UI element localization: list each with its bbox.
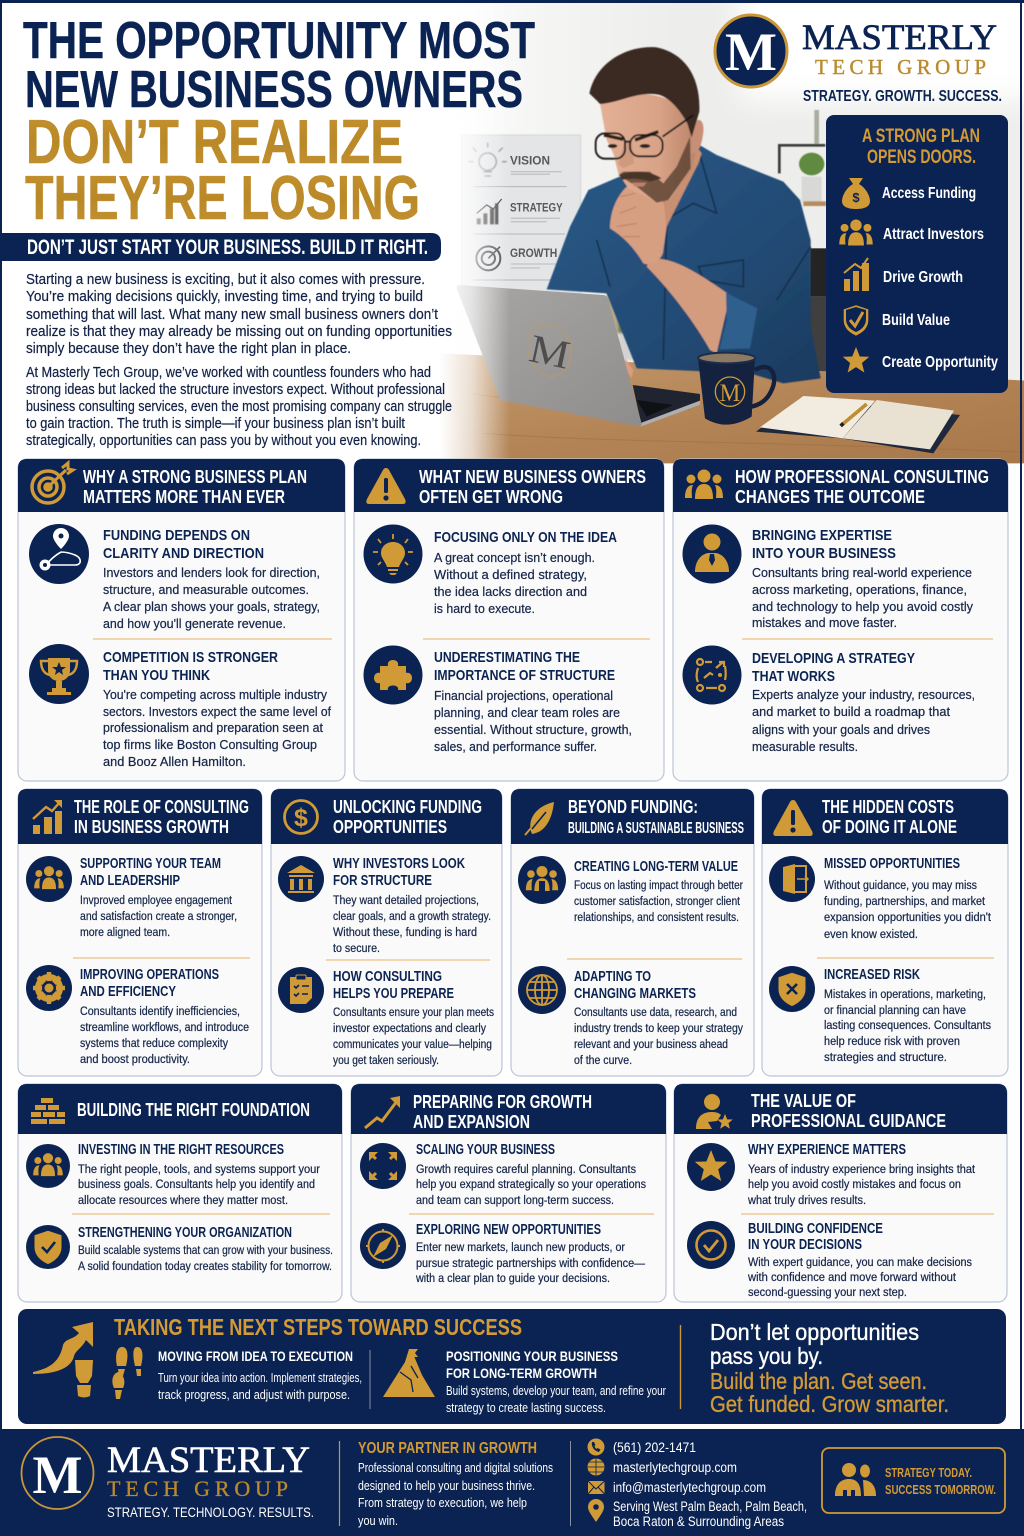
title: THE OPPORTUNITY MOST [23, 12, 535, 70]
item: bringing expertise: Consultants bring real-world experience [752, 565, 972, 580]
call to action text: Get funded. Grow smarter. [710, 1391, 949, 1417]
item: scaling your business: and team can support long-term success. [416, 1193, 614, 1207]
intro paragraph 1 [26, 272, 452, 357]
item: competition is stronger [29, 644, 331, 769]
panel heading: BUILDING A SUSTAINABLE BUSINESS [568, 820, 744, 837]
hair [589, 47, 699, 137]
shelf with plant [779, 110, 826, 206]
icon: dollar coin [284, 800, 318, 834]
laptop: M [525, 325, 574, 378]
panel: beyond funding [511, 789, 754, 1076]
item: investing in the right resources: allocate resources where they matter most. [78, 1193, 288, 1207]
benefit: drive growth: Drive Growth [883, 269, 963, 286]
item: adapting to changing markets: CHANGING MARKETS [574, 986, 696, 1002]
footer: contact details: info@masterlytechgroup.com [613, 1480, 766, 1495]
item: strengthening your organization: STRENGTHENING YOUR ORGANIZATION [78, 1225, 292, 1241]
item: funding depends on clarity: structure, and measurable outcomes. [103, 582, 309, 597]
step: moving from idea to execution: MOVING FROM IDEA TO EXECUTION [158, 1349, 353, 1364]
item: increased risk: or financial planning can have [824, 1003, 966, 1017]
panel heading: UNLOCKING FUNDING [333, 797, 482, 817]
panel heading [862, 126, 980, 168]
item: scaling your business: help you expand strategically so your operations [416, 1177, 646, 1191]
item: supporting your team: AND LEADERSHIP [80, 873, 180, 889]
icon: expand arrows [360, 1143, 406, 1189]
logo: Masterly Tech Group: TECH GROUP [815, 55, 986, 79]
step: positioning your business: strategy to create lasting success. [446, 1401, 606, 1415]
item: underestimating structure: planning, and clear team roles are [434, 705, 620, 720]
item: investing in the right resources: The right people, tools, and systems support your [78, 1162, 320, 1176]
item: competition is stronger: sectors. Investors expect the same level of [103, 704, 331, 719]
panel heading: OPPORTUNITIES [333, 817, 447, 837]
item: underestimating structure: UNDERESTIMATING THE [434, 649, 580, 666]
footer: your partner in growth: Professional consulting and digital solutions [358, 1461, 553, 1475]
icon: community [518, 856, 566, 904]
tagline banner [0, 233, 441, 261]
intro paragraph 2: strategically, opportunities can pass you by without you even knowing. [26, 433, 421, 449]
item: exploring new opportunities: Enter new markets, launch new products, or [416, 1240, 625, 1254]
item: improving operations: Consultants identify inefficiencies, [80, 1004, 240, 1018]
item: supporting your team: SUPPORTING YOUR TEAM [80, 856, 221, 872]
icon: compass [360, 1223, 406, 1269]
icon: light bulb [364, 524, 422, 584]
icon: star [687, 1143, 735, 1191]
item: increased risk: INCREASED RISK [824, 967, 920, 983]
footer logo: TECH GROUP [107, 1476, 288, 1501]
item: developing a strategy: THAT WORKS [752, 668, 835, 685]
title: NEW BUSINESS OWNERS [25, 61, 523, 119]
panel heading [822, 797, 957, 837]
panel heading: OFTEN GET WRONG [419, 487, 563, 507]
item: exploring new opportunities: with a clear plan to guide your decisions. [415, 1271, 610, 1285]
heading: TAKING THE NEXT STEPS TOWARD SUCCESS [114, 1314, 522, 1340]
panel: what new business owners get wrong [354, 459, 664, 781]
icon: check shield [26, 1225, 70, 1269]
panel: unlocking funding opportunities [271, 789, 502, 1076]
item: developing a strategy: aligns with your goals and drives [752, 722, 930, 737]
benefit: create opportunity: Create Opportunity [882, 354, 998, 371]
icon: consultant [682, 524, 742, 584]
icon: bank [278, 856, 324, 902]
footer: your partner in growth: YOUR PARTNER IN GROWTH [358, 1440, 537, 1457]
benefit: build value [844, 305, 950, 336]
benefit: attract investors [839, 219, 984, 245]
poster: vision, strategy, growth [462, 135, 581, 295]
item: bringing expertise [682, 524, 973, 630]
item: creating long-term value [518, 856, 743, 924]
icon: gear [26, 965, 72, 1011]
panel: role of consulting [18, 789, 262, 1076]
icon: door [769, 856, 815, 902]
title: DON’T REALIZE [26, 108, 403, 177]
item: why investors look for structure: They want detailed projections, [333, 893, 479, 907]
panel heading [333, 797, 482, 837]
mug: M [720, 379, 740, 407]
footer: contact details: Boca Raton & Surrounding Areas [613, 1514, 784, 1529]
icon: check circle [687, 1221, 735, 1269]
item: adapting to changing markets: of the curve. [574, 1053, 632, 1067]
mug [698, 353, 774, 425]
item: focusing only on the idea: FOCUSING ONLY ON THE IDEA [434, 529, 617, 546]
item: improving operations: IMPROVING OPERATIONS [80, 967, 219, 983]
footer: contact details: masterlytechgroup.com [613, 1460, 737, 1475]
item: adapting to changing markets: relevant and your business ahead [574, 1037, 728, 1051]
item: strengthening your organization [26, 1225, 333, 1273]
item: how consulting helps you prepare: you get taken seriously. [333, 1053, 439, 1067]
desk [440, 353, 1024, 463]
step: moving from idea to execution: Turn your idea into action. Implement strategies, [158, 1371, 362, 1385]
item: underestimating structure: essential. Without structure, growth, [434, 722, 632, 737]
neck [663, 140, 702, 227]
item: strengthening your organization: A solid foundation today creates stability for tomorrow. [78, 1259, 332, 1273]
icon: phone [588, 1438, 604, 1456]
laptop [457, 285, 700, 427]
item: building confidence [687, 1221, 972, 1299]
item: missed opportunities: even know existed. [824, 927, 918, 941]
tagline banner: DON’T JUST START YOUR BUSINESS. BUILD IT RIGHT. [27, 236, 428, 259]
icon: envelope [588, 1481, 604, 1494]
panel heading [419, 467, 646, 507]
intro paragraph 1: something that will last. What many new small business owners don’t [26, 307, 438, 323]
poster: vision, strategy, growth: GROWTH [510, 246, 557, 260]
logo badge: M [725, 22, 777, 82]
item: increased risk [769, 966, 991, 1064]
step: moving from idea to execution [158, 1349, 362, 1402]
item: supporting your team: Invproved employee engagement [80, 893, 233, 907]
item: missed opportunities: expansion opportunities you didn't [824, 910, 992, 924]
call to action text: pass you by. [710, 1343, 823, 1369]
intro paragraph 2 [26, 365, 452, 449]
panel heading [751, 1091, 946, 1131]
item: bringing expertise: INTO YOUR BUSINESS [752, 545, 896, 562]
item: building confidence: with confidence and move forward without [747, 1270, 957, 1284]
icon: team [26, 856, 72, 902]
icon: web globe [588, 1458, 604, 1476]
item: increased risk: Mistakes in operations, marketing, [824, 987, 986, 1001]
item: supporting your team [26, 856, 237, 939]
logo: Masterly Tech Group [715, 15, 1002, 105]
item: why investors look for structure: FOR STRUCTURE [333, 873, 432, 889]
panel heading [413, 1092, 592, 1132]
step: positioning your business: POSITIONING YOUR BUSINESS [446, 1349, 618, 1364]
item: why experience matters: help you avoid costly mistakes and focus on [748, 1177, 961, 1191]
item: improving operations: streamline workflows, and introduce [80, 1020, 249, 1034]
item: scaling your business [360, 1142, 646, 1207]
icon: route pin [29, 524, 89, 584]
item: missed opportunities: MISSED OPPORTUNITIES [824, 856, 960, 872]
item: funding depends on clarity: and how you'll generate revenue. [103, 616, 286, 631]
intro paragraph 2: business consulting services, even the most promising company can struggle [26, 399, 452, 415]
item: why experience matters [687, 1142, 976, 1207]
item: developing a strategy: and market to build a roadmap that [752, 704, 950, 719]
hand on chin [610, 187, 667, 264]
icon: clipboard [278, 967, 324, 1013]
panel heading: OPENS DOORS. [867, 147, 976, 168]
footer: your partner in growth [358, 1440, 553, 1528]
item: focusing only on the idea: the idea lacks direction and [434, 584, 587, 599]
benefit: access funding: Access Funding [882, 185, 976, 202]
footer logo: MASTERLY [107, 1440, 310, 1481]
item: strengthening your organization: Build scalable systems that can grow with your business. [78, 1243, 333, 1257]
item: improving operations: systems that reduce complexity [80, 1036, 229, 1050]
icon: rising arrow and steps [33, 1322, 142, 1399]
item: competition is stronger: and Booz Allen Hamilton. [103, 754, 246, 769]
item: focusing only on the idea: is hard to execute. [434, 601, 535, 616]
intro paragraph 2: to gain traction. The truth is simple—if your business plan isn’t built [26, 416, 405, 432]
item: creating long-term value: CREATING LONG-TERM VALUE [574, 859, 738, 875]
item: bringing expertise: across marketing, operations, finance, [752, 582, 967, 597]
item: bringing expertise: and technology to help you avoid costly [752, 599, 973, 614]
item: improving operations: AND EFFICIENCY [80, 984, 176, 1000]
item: creating long-term value: Focus on lasting impact through better [574, 878, 743, 892]
call to action text: Don’t let opportunities [710, 1319, 919, 1345]
item: underestimating structure: IMPORTANCE OF STRUCTURE [434, 667, 615, 684]
item: developing a strategy: Experts analyze your industry, resources, [752, 687, 975, 702]
item: focusing only on the idea: Without a defined strategy, [434, 567, 587, 582]
item: how consulting helps you prepare: HOW CONSULTING [333, 969, 442, 985]
call to action text [710, 1319, 949, 1417]
background items behind laptop [607, 287, 635, 360]
item: exploring new opportunities [360, 1222, 646, 1285]
item: funding depends on clarity: CLARITY AND DIRECTION [103, 545, 264, 562]
item: investing in the right resources: business goals. Consultants help you identify and [78, 1177, 315, 1191]
icon: location pin [588, 1499, 604, 1522]
icon: strategy map [682, 646, 742, 704]
logo: Masterly Tech Group: MASTERLY [802, 17, 997, 57]
panel heading: THE VALUE OF [751, 1091, 856, 1111]
shirt [547, 143, 821, 383]
benefit: access funding [842, 178, 976, 209]
panel: why a strong business plan matters [18, 459, 345, 781]
icon: warning [773, 800, 813, 836]
item: increased risk: strategies and structure. [824, 1050, 947, 1064]
hero photo: founder at laptop [440, 0, 1024, 463]
poster: vision, strategy, growth: STRATEGY [510, 201, 563, 215]
item: missed opportunities [769, 856, 992, 941]
item: adapting to changing markets: Consultants use data, research, and [574, 1005, 737, 1019]
panel: the value of professional guidance [674, 1084, 1007, 1302]
item: focusing only on the idea [364, 524, 617, 616]
panel heading: BEYOND FUNDING: [568, 797, 698, 817]
item: competition is stronger: top firms like Boston Consulting Group [103, 737, 317, 752]
item: how consulting helps you prepare [278, 967, 494, 1067]
icon: dollar coin: $ [294, 804, 308, 832]
item: how consulting helps you prepare: Consultants ensure your plan meets [333, 1005, 494, 1019]
item: bringing expertise: BRINGING EXPERTISE [752, 527, 892, 544]
item: underestimating structure: Financial projections, operational [434, 688, 613, 703]
panel heading: MATTERS MORE THAN EVER [83, 487, 285, 507]
item: why investors look for structure: to secure. [333, 941, 380, 955]
eyebrows and eyes [604, 132, 658, 140]
footer: your partner in growth: designed to help your business thrive. [358, 1479, 535, 1493]
icon: risk shield [769, 966, 815, 1012]
logo badge [715, 15, 787, 87]
item: building confidence: BUILDING CONFIDENCE [748, 1221, 883, 1237]
benefit: attract investors: Attract Investors [883, 226, 984, 243]
item: funding depends on clarity: A clear plan shows your goals, strategy, [103, 599, 320, 614]
item: scaling your business: SCALING YOUR BUSINESS [416, 1142, 555, 1158]
item: building confidence: With expert guidance, you can make decisions [748, 1255, 972, 1269]
step: positioning your business [446, 1349, 666, 1415]
footer logo [22, 1437, 314, 1520]
item: improving operations: and boost productivity. [80, 1052, 190, 1066]
item: supporting your team: and satisfaction create a stronger, [80, 909, 237, 923]
item: focusing only on the idea: A great concept isn’t enough. [434, 550, 595, 565]
item: developing a strategy: DEVELOPING A STRATEGY [752, 650, 915, 667]
item: adapting to changing markets: ADAPTING TO [574, 969, 651, 985]
item: scaling your business: Growth requires careful planning. Consultants [416, 1162, 636, 1176]
panel heading: PREPARING FOR GROWTH [413, 1092, 592, 1112]
item: competition is stronger: professionalism and preparation seen at [103, 720, 323, 735]
item: why experience matters: Years of industry experience bring insights that [748, 1162, 976, 1176]
glasses [596, 115, 693, 159]
item: why experience matters: what truly drives results. [747, 1193, 866, 1207]
panel: building the right foundation [18, 1084, 342, 1302]
item: missed opportunities: Without guidance, you may miss [824, 878, 977, 892]
footer: your partner in growth: From strategy to execution, we help [358, 1496, 527, 1510]
item: competition is stronger: You're competing across multiple industry [103, 687, 327, 702]
item: how consulting helps you prepare: HELPS YOU PREPARE [333, 986, 454, 1002]
item: competition is stronger: THAN YOU THINK [103, 667, 210, 684]
footer: contact details: Serving West Palm Beach, Palm Beach, [613, 1499, 807, 1514]
benefit: create opportunity [843, 347, 998, 372]
item: how consulting helps you prepare: communicates your value—helping [333, 1037, 492, 1051]
footer: contact details [588, 1438, 807, 1529]
poster: vision, strategy, growth: VISION [510, 154, 550, 168]
panel heading: WHY A STRONG BUSINESS PLAN [83, 467, 307, 487]
item: exploring new opportunities: pursue strategic partnerships with confidence— [416, 1256, 646, 1270]
step: positioning your business: Build systems, develop your team, and refine your [446, 1384, 666, 1398]
call to action text: Build the plan. Get seen. [710, 1368, 927, 1394]
panel heading [568, 797, 744, 837]
panel: hidden costs of doing it alone [762, 789, 1008, 1076]
forearm [647, 259, 730, 353]
chair [810, 248, 827, 297]
panel heading [83, 467, 307, 507]
head [600, 94, 698, 202]
footer: contact details: (561) 202-1471 [613, 1440, 696, 1455]
beard [618, 137, 691, 203]
item: competition is stronger: COMPETITION IS STRONGER [103, 649, 278, 666]
panel heading: BUILDING THE RIGHT FOUNDATION [77, 1100, 310, 1120]
panel heading: PROFESSIONAL GUIDANCE [751, 1111, 946, 1131]
panel: a strong plan opens doors [826, 115, 1008, 393]
item: underestimating structure: sales, and performance suffer. [434, 739, 597, 754]
icon: bricks [31, 1098, 65, 1124]
panel heading: OF DOING IT ALONE [822, 817, 957, 837]
panel heading: IN BUSINESS GROWTH [74, 817, 229, 837]
item: funding depends on clarity: Investors and lenders look for direction, [103, 565, 320, 580]
icon: growth chart [33, 800, 62, 834]
item: missed opportunities: funding, partnerships, and market [824, 894, 986, 908]
panel heading [74, 797, 249, 837]
item: increased risk: lasting consequences. Consultants [824, 1018, 991, 1032]
item: supporting your team: more aligned team. [80, 925, 170, 939]
intro paragraph 2: At Masterly Tech Group, we’ve worked with countless founders who had [26, 365, 431, 381]
panel: taking the next steps [18, 1309, 1006, 1424]
icon: puzzle piece [364, 646, 422, 704]
icon: target [32, 463, 73, 503]
footer [0, 1429, 1024, 1536]
panel: how professional consulting changes the outcome [673, 459, 1008, 781]
footer logo: M [32, 1445, 82, 1505]
intro paragraph 2: strong ideas but lacked the structure investors expect. Without professional [26, 382, 445, 398]
intro paragraph 1: You’re making decisions quickly, investing time, and trying to build [26, 289, 423, 305]
sleeve cuff [719, 293, 757, 349]
item: why investors look for structure: clear goals, and a growth strategy. [333, 909, 491, 923]
item: why investors look for structure [278, 856, 491, 955]
item: exploring new opportunities: EXPLORING NEW OPPORTUNITIES [416, 1222, 601, 1238]
icon: person with star [696, 1094, 733, 1129]
icon: team [685, 470, 723, 499]
item: investing in the right resources [26, 1142, 320, 1207]
footer: your partner in growth: you win. [358, 1514, 398, 1528]
callout: strategy today, success tomorrow: STRATEGY TODAY. [885, 1465, 972, 1480]
item: adapting to changing markets: industry trends to keep your strategy [574, 1021, 744, 1035]
item: why investors look for structure: Without these, funding is hard [333, 925, 477, 939]
item: creating long-term value: relationships, and consistent results. [574, 910, 739, 924]
icon: trophy [29, 644, 89, 704]
panel heading [735, 467, 989, 507]
item: developing a strategy: measurable results. [752, 739, 858, 754]
item: investing in the right resources: INVESTING IN THE RIGHT RESOURCES [78, 1142, 284, 1158]
icon: globe [518, 966, 566, 1014]
man [547, 47, 821, 383]
benefit: access funding: $ [852, 190, 860, 205]
item: funding depends on clarity [29, 524, 320, 631]
icon: warning [366, 468, 406, 504]
step: moving from idea to execution: track progress, and adjust with purpose. [158, 1388, 350, 1402]
icon: leaf [525, 802, 554, 835]
item: building confidence: second-guessing your next step. [748, 1285, 907, 1299]
item: bringing expertise: mistakes and move faster. [752, 615, 897, 630]
title: THEY’RE LOSING [25, 164, 420, 233]
footer logo: STRATEGY. TECHNOLOGY. RESULTS. [107, 1504, 314, 1520]
intro paragraph 1: simply because they don’t have the right plan in place. [26, 341, 351, 357]
panel: preparing for growth and expansion [351, 1084, 666, 1302]
icon: partners [835, 1463, 876, 1496]
panel heading: A STRONG PLAN [862, 126, 980, 147]
item: adapting to changing markets [518, 966, 744, 1067]
item: improving operations [26, 965, 249, 1066]
notebook and pen [756, 396, 960, 453]
item: why investors look for structure: WHY INVESTORS LOOK [333, 856, 465, 872]
benefit: drive growth [844, 258, 963, 291]
icon: mountain flag [383, 1349, 435, 1397]
intro paragraph 1: realize is that they may already be missing out on funding opportunities [26, 324, 452, 340]
panel heading: THE ROLE OF CONSULTING [74, 797, 249, 817]
callout: strategy today, success tomorrow [822, 1448, 1005, 1513]
icon: team [26, 1144, 70, 1188]
item: increased risk: help reduce risk with proven [824, 1034, 960, 1048]
benefit: build value: Build Value [882, 312, 950, 329]
panel heading: WHAT NEW BUSINESS OWNERS [419, 467, 646, 487]
item: underestimating structure [364, 646, 632, 754]
item: building confidence: IN YOUR DECISIONS [748, 1237, 862, 1253]
title [23, 12, 535, 233]
panel heading: CHANGES THE OUTCOME [735, 487, 925, 507]
panel heading: AND EXPANSION [413, 1112, 530, 1132]
item: why experience matters: WHY EXPERIENCE MATTERS [748, 1142, 906, 1158]
item: developing a strategy [682, 646, 975, 754]
panel heading: THE HIDDEN COSTS [822, 797, 954, 817]
item: creating long-term value: customer satisfaction, stronger client [574, 894, 741, 908]
icon: rising arrow [365, 1096, 400, 1128]
item: how consulting helps you prepare: investor expectations and clearly [333, 1021, 487, 1035]
item: funding depends on clarity: FUNDING DEPENDS ON [103, 527, 250, 544]
intro paragraph 1: Starting a new business is exciting, but it also comes with pressure. [26, 272, 425, 288]
step: positioning your business: FOR LONG-TERM GROWTH [446, 1366, 597, 1381]
